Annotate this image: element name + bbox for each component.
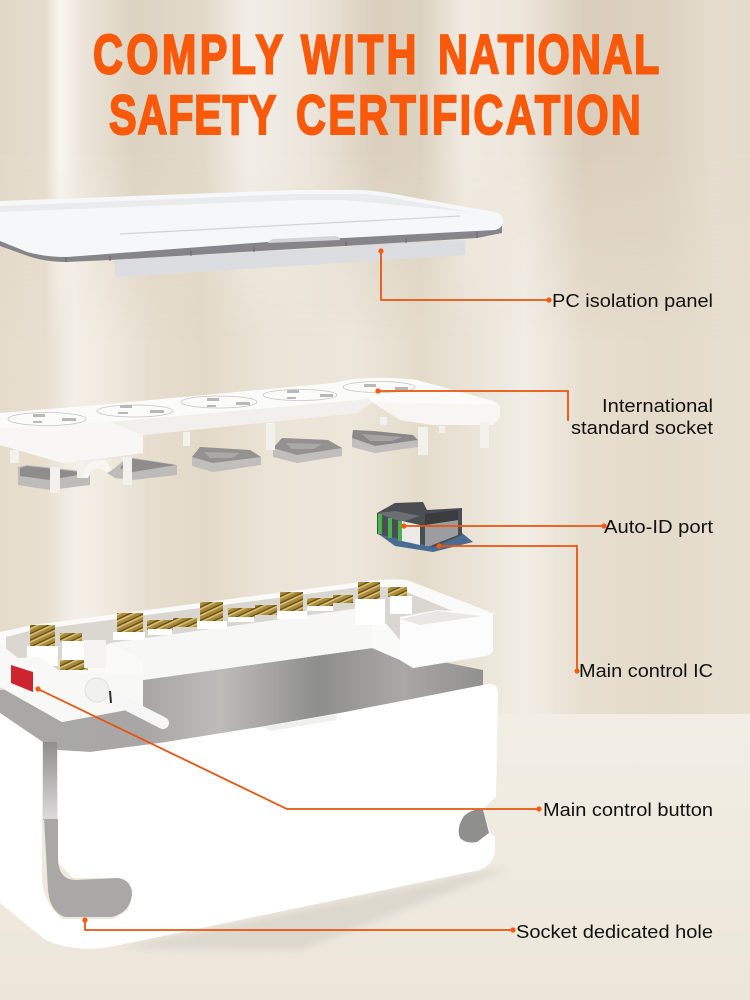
callout: Main control button: Main control button — [543, 800, 713, 820]
module 2 — [107, 457, 177, 480]
callout: PC isolation panel: PC isolation panel — [552, 291, 713, 311]
title: WITH — [301, 23, 416, 86]
component: PC isolation panel — [0, 190, 503, 277]
component: gray box interior — [0, 648, 493, 820]
module 5 — [352, 430, 418, 453]
module 1 — [18, 465, 90, 490]
callout: Main control IC — [436, 543, 713, 681]
title: SAFETY — [109, 84, 276, 147]
power switch — [0, 644, 143, 722]
title: COMPLY — [93, 23, 283, 86]
title — [93, 23, 659, 147]
callout: Main control IC: Main control IC — [579, 661, 713, 681]
callout: International standard socket: International — [602, 396, 713, 416]
callout: Main control button — [35, 686, 713, 820]
callout: Auto-ID port — [401, 517, 713, 537]
component: socket inner modules — [18, 430, 418, 490]
module 4 — [273, 438, 342, 463]
callout: International standard socket — [375, 388, 713, 438]
callout: International standard socket: standard socket — [571, 418, 713, 438]
component: socket cover — [0, 378, 500, 493]
terminals — [30, 582, 407, 647]
module 3 — [192, 447, 261, 472]
title: NATIONAL — [438, 23, 659, 86]
component: Auto-ID port board — [377, 502, 473, 552]
posts — [10, 417, 489, 493]
callout: PC isolation panel — [378, 248, 713, 311]
callout: Socket dedicated hole — [82, 917, 713, 942]
socket outlines — [8, 382, 415, 426]
callout: Socket dedicated hole: Socket dedicated hole — [516, 922, 713, 942]
title: CERTIFICATION — [296, 84, 641, 147]
callout: Auto-ID port: Auto-ID port — [604, 517, 713, 537]
component: main box — [0, 684, 498, 949]
power cord — [112, 697, 163, 723]
component: wiring tray with terminals — [0, 579, 493, 723]
